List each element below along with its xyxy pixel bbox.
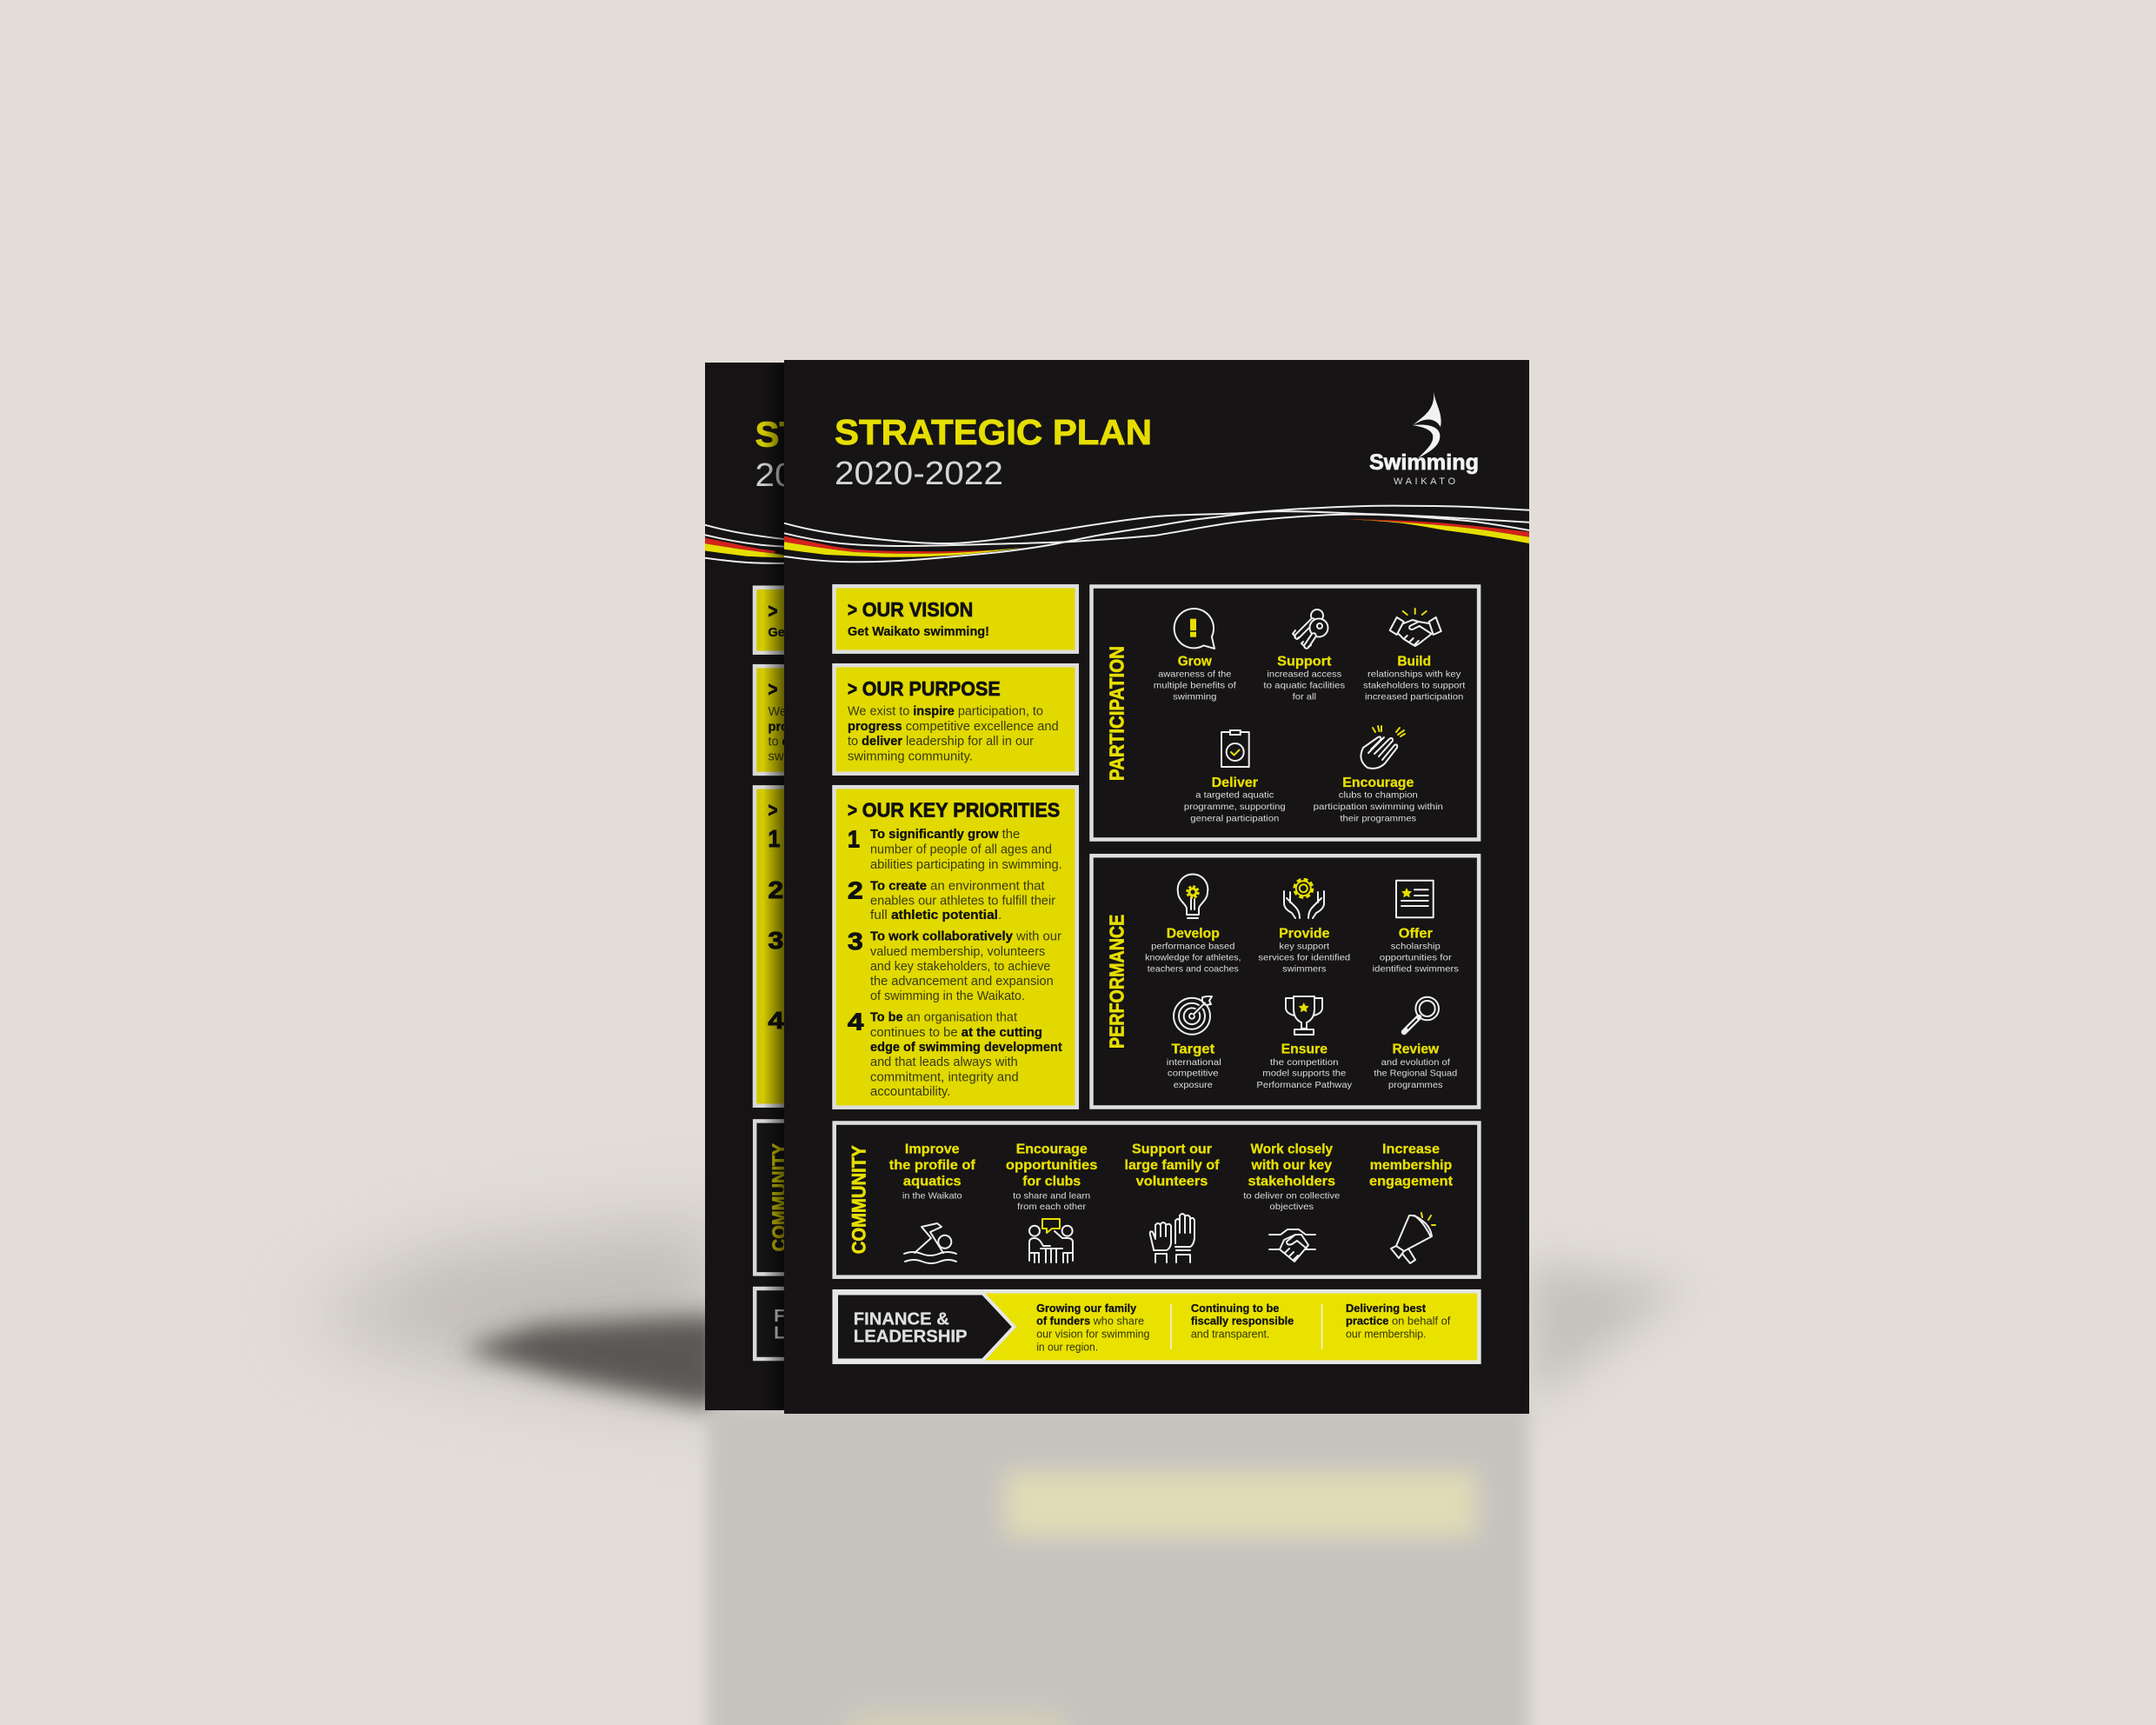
back title: STRATEGIC PLAN xyxy=(755,415,1072,454)
Target description: international xyxy=(1167,1057,1221,1068)
priority 3: To work collaboratively with our xyxy=(870,930,1061,944)
Encourage opportunities heading xyxy=(1006,1142,1098,1189)
back priority numbers: 4 xyxy=(769,1007,784,1034)
priorities box xyxy=(835,787,1077,1108)
item: Encourage opportunities xyxy=(1006,1142,1098,1262)
Improve heading: Improve xyxy=(905,1142,960,1157)
Grow description: swimming xyxy=(1173,691,1217,702)
vision chevron: > xyxy=(848,598,857,621)
panel: participation xyxy=(1092,586,1479,840)
icon: clipboard with tick xyxy=(1221,730,1249,767)
back purpose text: We exist to inspire participation, to xyxy=(769,705,963,719)
back vision box xyxy=(753,585,784,655)
back finance label xyxy=(775,1309,784,1339)
back priorities box xyxy=(753,785,784,1108)
finance column 3: practice on behalf of xyxy=(1346,1315,1451,1328)
priority 4: To be an organisation that xyxy=(870,1011,1017,1025)
icon: raised hands xyxy=(1150,1214,1194,1262)
Support volunteers heading xyxy=(1125,1142,1220,1189)
logo wordmark: Swimming xyxy=(1369,450,1479,475)
Deliver description xyxy=(1184,790,1286,823)
purpose text xyxy=(848,704,1059,763)
back vision line: Get Waikato swimming! xyxy=(769,626,909,640)
logo: Swimming Waikato xyxy=(1369,391,1479,487)
Encourage opportunities description xyxy=(1013,1190,1090,1212)
purpose chevron: > xyxy=(848,677,857,700)
performance frame xyxy=(1092,856,1479,1108)
finance column 3: Delivering best xyxy=(1346,1302,1427,1315)
Target description: exposure xyxy=(1174,1080,1213,1090)
Deliver description: a targeted aquatic xyxy=(1195,790,1274,801)
item: Develop xyxy=(1145,874,1241,975)
Encourage description: their programmes xyxy=(1340,813,1416,823)
vision box xyxy=(835,586,1077,652)
Increase heading: membership xyxy=(1370,1158,1452,1173)
purpose box xyxy=(835,665,1077,774)
Offer description: scholarship xyxy=(1391,942,1441,952)
finance heading: LEADERSHIP xyxy=(854,1327,968,1346)
priority 1: To significantly grow the xyxy=(870,828,1020,842)
purpose text: swimming community. xyxy=(848,749,973,763)
performance vertical label: PERFORMANCE xyxy=(1105,915,1128,1049)
icon: clapping hands xyxy=(1361,726,1405,769)
finance column 3 xyxy=(1346,1302,1451,1341)
finance column 1: in our region. xyxy=(1036,1341,1098,1353)
Develop description: teachers and coaches xyxy=(1148,964,1239,975)
Improve heading: aquatics xyxy=(903,1174,962,1189)
Support volunteers heading: volunteers xyxy=(1136,1174,1208,1189)
icon: swimmer xyxy=(904,1223,956,1263)
Target description xyxy=(1167,1057,1221,1090)
icon: target with arrow xyxy=(1174,996,1212,1035)
item: Provide xyxy=(1258,879,1350,975)
item: Build xyxy=(1363,609,1465,702)
community vertical label: COMMUNITY xyxy=(848,1145,870,1254)
Encourage opportunities heading: opportunities xyxy=(1006,1158,1098,1173)
finance column 1 xyxy=(1036,1302,1150,1353)
Encourage description: clubs to champion xyxy=(1339,790,1418,801)
icon: hands holding gear xyxy=(1284,879,1324,918)
icon: trophy with star xyxy=(1286,996,1322,1035)
panel: our vision xyxy=(835,586,1077,652)
Increase heading xyxy=(1369,1142,1454,1189)
finance yellow strip xyxy=(835,1291,1479,1362)
finance column 2 xyxy=(1191,1302,1294,1341)
finance column 1: of funders who share xyxy=(1036,1315,1144,1328)
Work closely heading: Work closely xyxy=(1251,1142,1333,1157)
Build description: stakeholders to support xyxy=(1363,680,1465,690)
priority 2: To create an environment that xyxy=(870,879,1045,893)
item: Grow xyxy=(1154,609,1236,702)
Review heading: Review xyxy=(1392,1042,1440,1057)
Provide description: services for identified xyxy=(1258,952,1350,962)
Ensure description xyxy=(1256,1057,1353,1090)
Develop description: knowledge for athletes, xyxy=(1145,952,1241,962)
back purpose heading mark: > xyxy=(769,678,777,701)
priority 4: edge of swimming development xyxy=(870,1041,1062,1055)
item: Work closely xyxy=(1243,1142,1340,1262)
priority 3: valued membership, volunteers xyxy=(870,945,1045,959)
finance arrow label block xyxy=(836,1294,1014,1360)
back year: 2020-2022 xyxy=(755,457,923,494)
item: Ensure xyxy=(1256,996,1353,1090)
sheet background xyxy=(784,360,1529,1414)
priority 4 xyxy=(848,1009,1062,1099)
back purpose text: progress competitive excellence and xyxy=(769,721,979,735)
Grow description: multiple benefits of xyxy=(1154,680,1236,690)
title: STRATEGIC PLAN xyxy=(835,412,1152,452)
item: Encourage xyxy=(1314,726,1443,823)
icon: handshake with rays xyxy=(1390,609,1441,646)
Target description: competitive xyxy=(1168,1069,1219,1079)
back wave xyxy=(705,523,784,564)
finance heading: FINANCE & xyxy=(854,1309,949,1329)
icon: keys xyxy=(1293,609,1328,647)
Develop description xyxy=(1145,942,1241,975)
priority 1: number of people of all ages and xyxy=(870,843,1052,857)
icon: light bulb with gear xyxy=(1178,874,1208,918)
Encourage heading: Encourage xyxy=(1342,776,1414,790)
community frame xyxy=(835,1123,1479,1277)
Support description: to aquatic facilities xyxy=(1263,680,1345,690)
Deliver description: general participation xyxy=(1190,813,1279,823)
Build description: increased participation xyxy=(1365,691,1464,702)
icon: speech bubble with exclamation xyxy=(1174,609,1214,649)
Ensure description: the competition xyxy=(1270,1057,1339,1068)
Provide description xyxy=(1258,942,1350,975)
back sheet, mostly hidden behind the front sheet xyxy=(705,363,784,1410)
Offer description xyxy=(1373,942,1459,975)
item: Improve xyxy=(889,1142,975,1263)
Grow description xyxy=(1154,669,1236,702)
Support description: increased access xyxy=(1267,669,1341,680)
Review description: the Regional Squad xyxy=(1374,1069,1457,1079)
item: Increase xyxy=(1369,1142,1454,1263)
purpose text: We exist to inspire participation, to xyxy=(848,704,1043,718)
finance column 2: fiscally responsible xyxy=(1191,1315,1294,1328)
Work closely description: objectives xyxy=(1269,1202,1314,1212)
Encourage opportunities description: from each other xyxy=(1017,1202,1087,1212)
panel: performance xyxy=(1092,856,1479,1108)
item: Support volunteers xyxy=(1125,1142,1220,1262)
priority 4: and that leads always with xyxy=(870,1056,1018,1069)
priority 1: 1 xyxy=(848,825,860,852)
Work closely description: to deliver on collective xyxy=(1243,1190,1340,1201)
priority 4: continues to be at the cutting xyxy=(870,1026,1042,1040)
priority 3: of swimming in the Waikato. xyxy=(870,989,1025,1003)
purpose text: progress competitive excellence and xyxy=(848,720,1059,734)
priority 2: enables our athletes to fulfill their xyxy=(870,894,1055,908)
Build description: relationships with key xyxy=(1367,669,1461,680)
Ensure description: model supports the xyxy=(1262,1069,1346,1079)
back vision text: > xyxy=(769,599,777,622)
Offer description: identified swimmers xyxy=(1373,964,1459,975)
back priorities heading mark: > xyxy=(769,799,777,822)
purpose text: to deliver leadership for all in our xyxy=(848,735,1034,749)
priority 1: abilities participating in swimming. xyxy=(870,858,1062,872)
priority 2 xyxy=(848,876,1055,922)
back community box xyxy=(753,1119,784,1276)
back finance label: FINANCE & xyxy=(774,1307,869,1326)
priority 3: 3 xyxy=(848,928,863,955)
finance column 2: and transparent. xyxy=(1191,1329,1269,1341)
wave band xyxy=(784,506,1529,562)
back finance label: LEADERSHIP xyxy=(774,1324,888,1343)
back priority numbers: 3 xyxy=(769,927,783,954)
icon: certificate with star xyxy=(1396,881,1434,917)
Provide description: swimmers xyxy=(1282,964,1326,975)
item: Target xyxy=(1167,996,1221,1090)
Encourage opportunities heading: Encourage xyxy=(1016,1142,1088,1157)
priority 4: accountability. xyxy=(870,1085,950,1099)
priorities chevron: > xyxy=(848,799,857,822)
year subtitle: 2020-2022 xyxy=(835,456,1003,492)
Grow description: awareness of the xyxy=(1158,669,1232,680)
Deliver description: programme, supporting xyxy=(1184,802,1286,812)
Encourage description xyxy=(1314,790,1443,823)
logo subline: WAIKATO xyxy=(1394,476,1455,487)
back purpose text: to deliver leadership for all in our xyxy=(769,735,955,749)
panel: finance and leadership xyxy=(835,1291,1479,1362)
Support volunteers heading: large family of xyxy=(1125,1158,1220,1173)
panel: our key priorities xyxy=(835,787,1077,1108)
icon: megaphone xyxy=(1391,1213,1435,1263)
priority 3: and key stakeholders, to achieve xyxy=(870,960,1050,974)
back finance box xyxy=(753,1287,784,1362)
back priority numbers: 2 xyxy=(769,876,783,903)
Encourage opportunities description: to share and learn xyxy=(1013,1190,1090,1201)
back priority numbers: 1 xyxy=(769,825,781,852)
Grow heading: Grow xyxy=(1178,655,1212,669)
Support heading: Support xyxy=(1277,655,1332,669)
Work closely description xyxy=(1243,1190,1340,1212)
Work closely heading: stakeholders xyxy=(1248,1174,1335,1189)
Work closely heading: with our key xyxy=(1251,1158,1332,1173)
Support description xyxy=(1263,669,1345,702)
Review description xyxy=(1374,1057,1457,1090)
Increase heading: engagement xyxy=(1369,1174,1454,1189)
Increase heading: Increase xyxy=(1382,1142,1440,1157)
participation frame xyxy=(1092,586,1479,840)
item: Review xyxy=(1374,997,1457,1090)
Support volunteers heading: Support our xyxy=(1132,1142,1212,1157)
priorities heading: OUR KEY PRIORITIES xyxy=(862,799,1060,822)
Support description: for all xyxy=(1293,691,1316,702)
priority 3: the advancement and expansion xyxy=(870,975,1054,989)
Build heading: Build xyxy=(1397,655,1431,669)
Target heading: Target xyxy=(1171,1042,1215,1057)
Work closely heading xyxy=(1248,1142,1335,1189)
priority 3 xyxy=(848,928,1061,1003)
item: Support xyxy=(1263,609,1345,702)
finance column 3: our membership. xyxy=(1346,1329,1426,1341)
Develop heading: Develop xyxy=(1167,927,1220,942)
purpose heading: OUR PURPOSE xyxy=(862,677,1001,700)
item: Offer xyxy=(1373,881,1459,975)
finance column 1: Growing our family xyxy=(1036,1302,1136,1315)
icon: handshake xyxy=(1269,1229,1315,1262)
Build description xyxy=(1363,669,1465,702)
back priority numbers xyxy=(769,825,784,1034)
back purpose box xyxy=(753,664,784,776)
priority 1 xyxy=(848,825,1062,872)
icon: magnifying glass xyxy=(1404,997,1439,1032)
Improve heading: the profile of xyxy=(889,1158,975,1173)
back community label: COMMUNITY xyxy=(769,1143,790,1251)
Improve heading xyxy=(889,1142,975,1189)
back purpose text: swimming community. xyxy=(769,750,894,764)
Provide heading: Provide xyxy=(1279,927,1330,942)
Encourage opportunities heading: for clubs xyxy=(1022,1174,1081,1189)
Deliver heading: Deliver xyxy=(1212,776,1258,790)
Ensure heading: Ensure xyxy=(1281,1042,1328,1057)
icon: people at table with speech bubble xyxy=(1029,1219,1073,1262)
Review description: programmes xyxy=(1388,1080,1443,1090)
Review description: and evolution of xyxy=(1381,1057,1450,1068)
vision text: Get Waikato swimming! xyxy=(848,625,989,639)
Improve description: in the Waikato xyxy=(902,1190,962,1201)
vision heading: OUR VISION xyxy=(862,598,973,621)
Encourage description: participation swimming within xyxy=(1314,802,1443,812)
finance column 1: our vision for swimming xyxy=(1036,1329,1150,1341)
logo swoosh xyxy=(1413,391,1441,458)
Provide description: key support xyxy=(1279,942,1329,952)
Develop description: performance based xyxy=(1151,942,1235,952)
finance heading xyxy=(854,1309,968,1346)
panel: our purpose xyxy=(835,665,1077,774)
finance column 2: Continuing to be xyxy=(1191,1302,1279,1315)
Offer description: opportunities for xyxy=(1380,952,1452,962)
priority 2: 2 xyxy=(848,876,863,904)
front sheet xyxy=(784,360,1529,1414)
priority 2: full athletic potential . xyxy=(870,909,1001,922)
Offer heading: Offer xyxy=(1399,927,1433,942)
item: Deliver xyxy=(1184,730,1286,823)
priority 4: commitment, integrity and xyxy=(870,1070,1019,1084)
priority 4: 4 xyxy=(848,1009,864,1035)
panel: community xyxy=(835,1123,1479,1277)
reflection on floor xyxy=(708,1407,1529,1725)
participation vertical label: PARTICIPATION xyxy=(1105,646,1128,781)
back purpose text xyxy=(769,707,784,760)
Ensure description: Performance Pathway xyxy=(1256,1080,1353,1090)
